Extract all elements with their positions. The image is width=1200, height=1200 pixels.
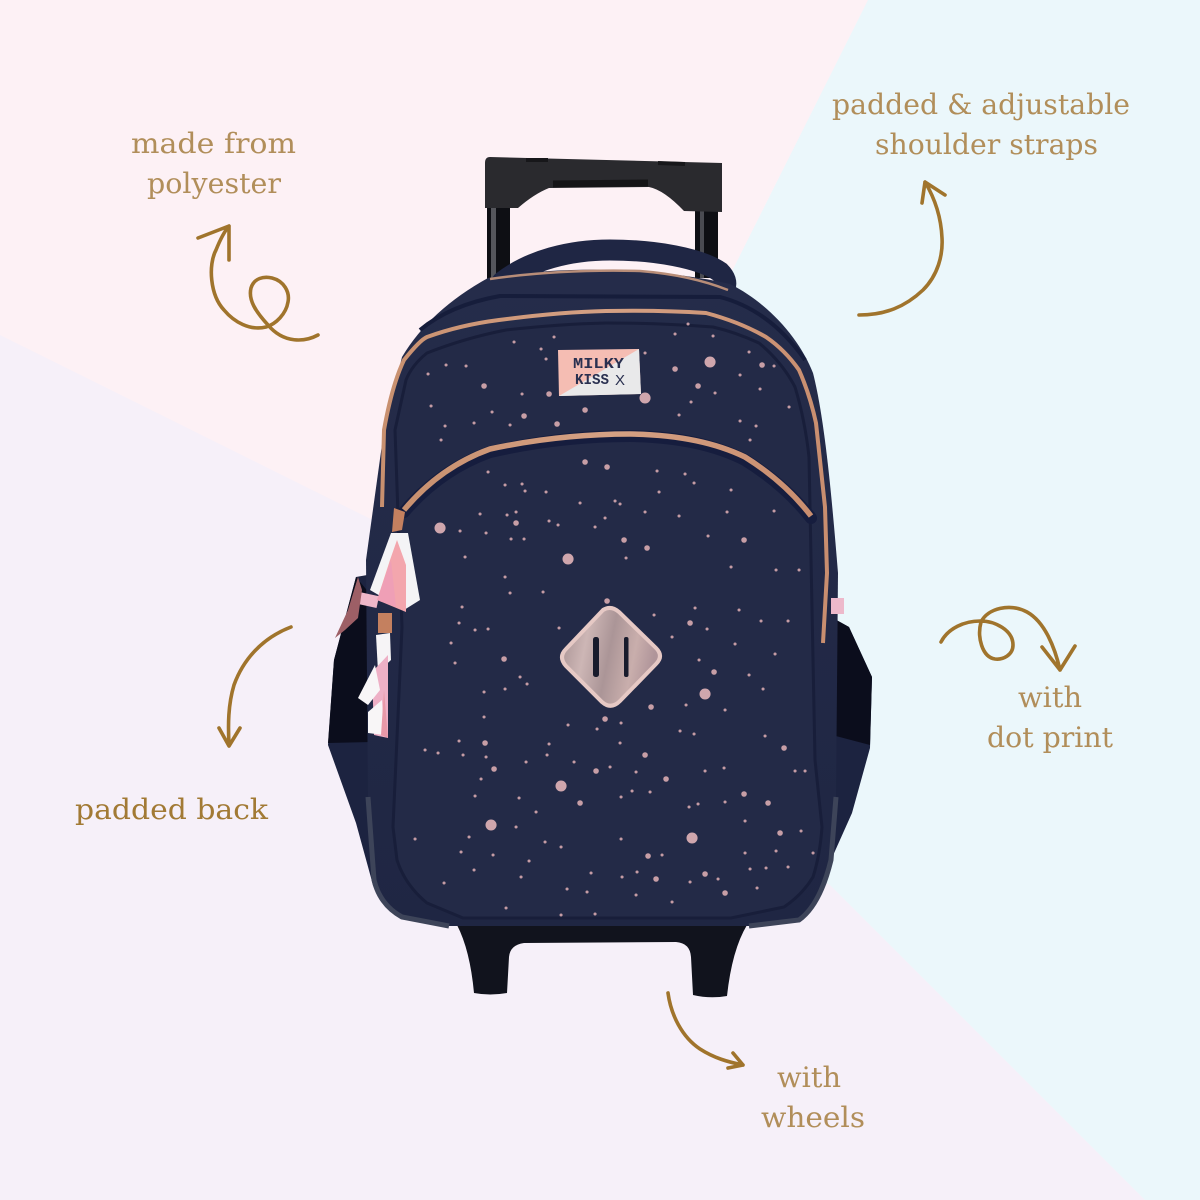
callout: with dot print (941, 607, 1114, 754)
callout: with wheels (668, 993, 865, 1134)
heading: shoulder straps: padded & adjustable (832, 88, 1130, 121)
arrow: looped, pointing up to polyester text (198, 226, 318, 340)
heading: padded back: padded back (75, 793, 269, 826)
heading: made from polyester (131, 127, 296, 200)
heading: with dot print: dot print (987, 721, 1114, 754)
wheel frame legs (457, 925, 747, 997)
side mesh pocket right (810, 617, 872, 860)
rose-gold dot print: small dots (415, 324, 813, 915)
pink side tabs (357, 592, 844, 614)
diamond logo patch (562, 608, 660, 706)
pocket zipper arc (404, 436, 811, 518)
main body (366, 270, 838, 926)
backpack on wheels (328, 157, 872, 997)
heading: with wheels (761, 1061, 865, 1134)
heading: shoulder straps (832, 88, 1130, 161)
upper piping seam (420, 296, 805, 360)
heading: shoulder straps: shoulder straps (875, 128, 1098, 161)
callout: made from polyester (131, 127, 318, 340)
side mesh pocket left (328, 570, 395, 885)
heading: with wheels: wheels (761, 1101, 865, 1134)
callout: padded and adjustable shoulder straps (832, 88, 1130, 315)
telescopic trolley handle (485, 157, 722, 293)
brand label: X (615, 372, 625, 389)
heading: with wheels: with (777, 1061, 841, 1094)
heading: made from polyester: polyester (147, 167, 282, 200)
top carry handle (502, 250, 726, 288)
heading: made from polyester: made from (131, 127, 296, 160)
rose-gold dot print: large dots (440, 362, 710, 838)
front panel (393, 323, 822, 918)
heading: with dot print: with (1018, 681, 1082, 714)
upper zipper (382, 311, 827, 643)
brand label: KISS (575, 372, 609, 389)
brand label: MILKY (573, 356, 624, 373)
zip pull and upper tassel (370, 508, 420, 612)
heading: with dot print (987, 681, 1114, 754)
arrow: looped, pointing down to dot print text (941, 607, 1075, 670)
brand label (558, 349, 641, 396)
arrow: curved up to shoulder straps text (859, 182, 945, 315)
lower tassel (358, 613, 392, 738)
arrow: curved right to wheels text (668, 993, 743, 1068)
callout: padded back (75, 627, 291, 826)
rose-gold dot print: medium dots (484, 365, 784, 893)
side charm (335, 577, 362, 638)
top zipper (490, 271, 728, 290)
arrow: curved down to padded back text (219, 627, 291, 746)
side gusset strip (368, 797, 836, 926)
